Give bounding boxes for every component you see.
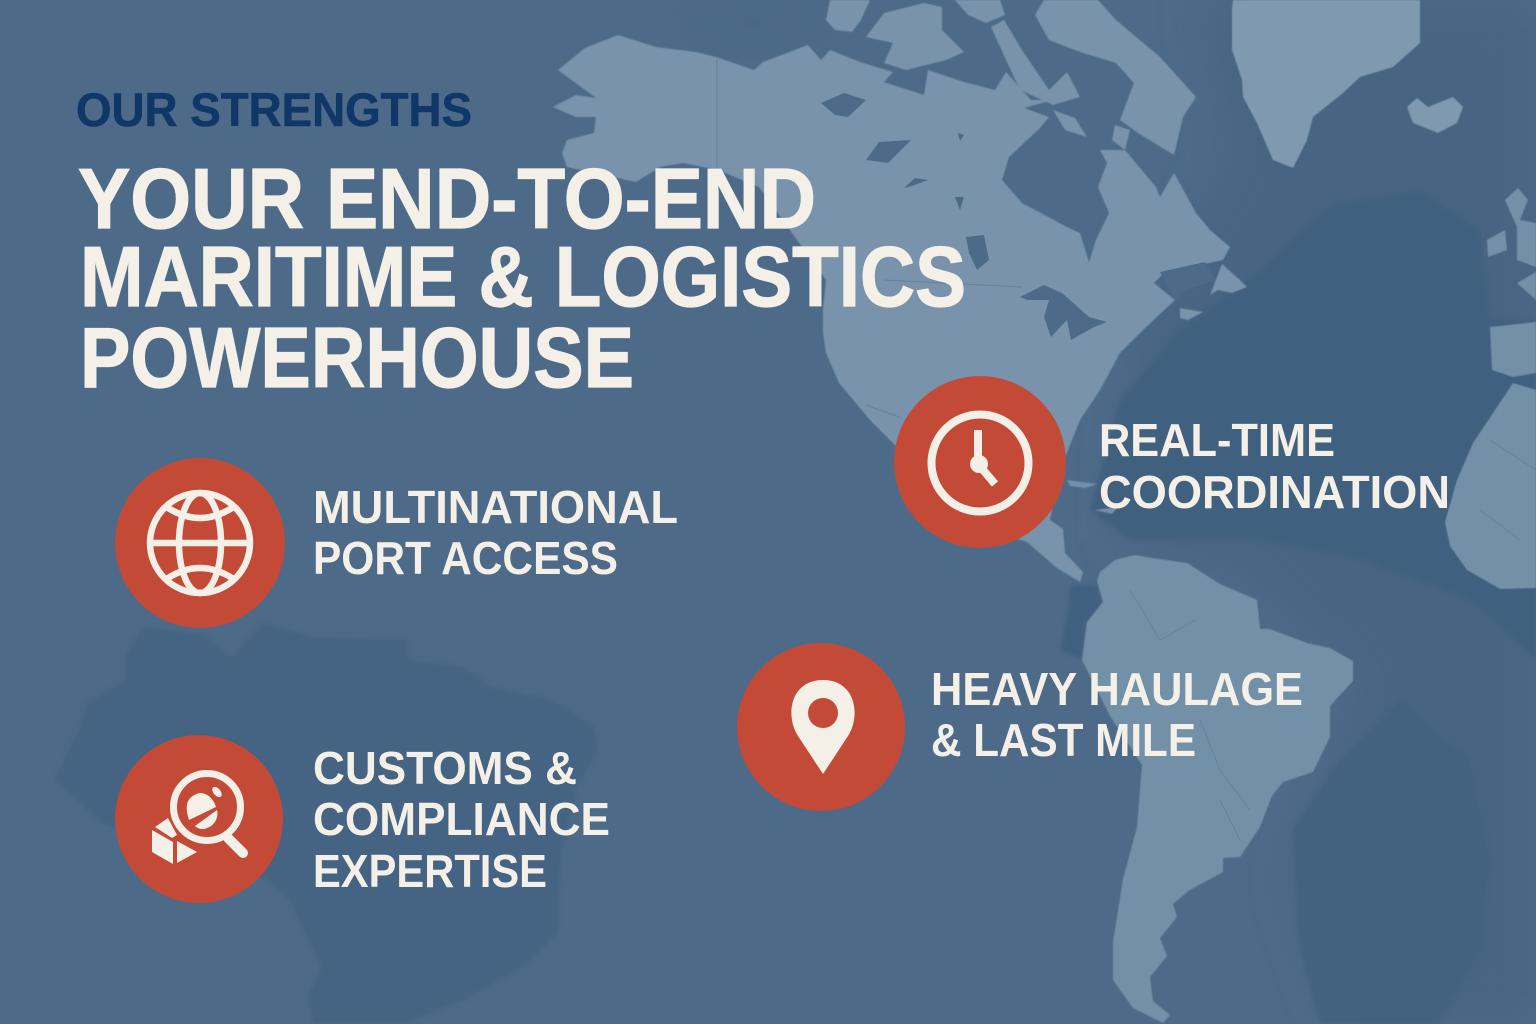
light land: Iceland	[1407, 97, 1463, 133]
light land: South America	[1082, 555, 1353, 1023]
main title	[78, 152, 966, 406]
light land: North America	[553, 35, 1230, 582]
label: EXPERTISE	[313, 845, 547, 897]
item: customs and compliance expertise	[115, 735, 610, 903]
item: multinational port access	[115, 458, 678, 628]
main title: YOUR END-TO-END	[78, 152, 816, 247]
light land: Arctic islands	[826, 0, 1247, 320]
label: CUSTOMS &	[313, 742, 577, 794]
main title: POWERHOUSE	[80, 311, 634, 406]
main title: MARITIME & LOGISTICS	[80, 230, 966, 325]
label: COMPLIANCE	[313, 793, 610, 845]
label	[1099, 414, 1450, 518]
label: COORDINATION	[1099, 466, 1450, 518]
label: REAL-TIME	[1099, 414, 1335, 466]
label: HEAVY HAULAGE	[931, 663, 1303, 715]
icon: location pin	[737, 643, 905, 811]
ocean depth shading	[690, 0, 1536, 1024]
label	[313, 742, 610, 897]
light land: Africa and Europe	[1067, 188, 1536, 589]
label	[313, 481, 678, 584]
border lines	[717, 57, 1536, 840]
icon: clock	[894, 376, 1066, 548]
icon: globe	[115, 458, 285, 628]
lakes and inland water	[821, 93, 1215, 340]
label: MULTINATIONAL	[313, 481, 678, 533]
item: heavy haulage and last mile	[737, 643, 1303, 811]
eyebrow heading: OUR STRENGTHS	[76, 83, 472, 136]
lower-left darker landmass	[54, 623, 598, 1024]
light land: Greenland	[1232, 0, 1420, 168]
item: real-time coordination	[894, 376, 1450, 548]
label: & LAST MILE	[931, 714, 1196, 766]
label	[931, 663, 1303, 766]
icon: magnifier over parcel	[115, 735, 283, 903]
label: PORT ACCESS	[313, 532, 618, 584]
